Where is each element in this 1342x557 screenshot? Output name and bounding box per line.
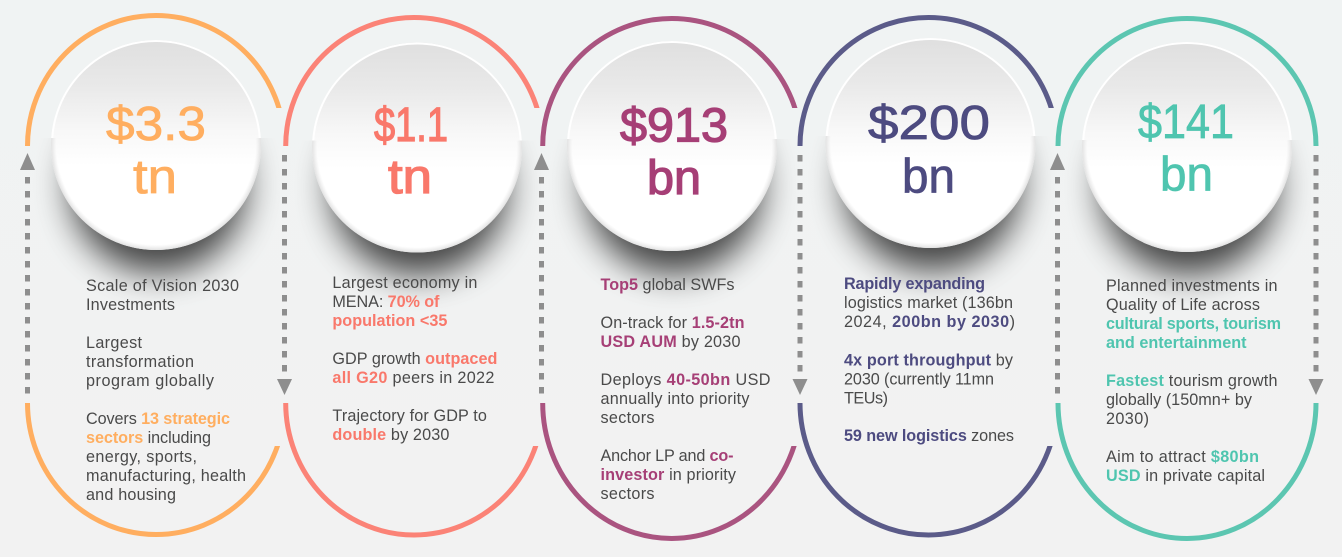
text block: Trajectory for GDP to <box>332 407 487 425</box>
bottom arc: orange <box>28 403 284 535</box>
bottom arc: plum <box>543 403 801 538</box>
value <box>106 98 206 204</box>
value: $1.1 <box>374 99 448 152</box>
text block: 2030 (currently 11mn <box>844 370 994 388</box>
text block <box>86 277 246 504</box>
text block: Fastest tourism growth <box>1106 372 1278 390</box>
text block: Rapidly expanding <box>844 275 985 293</box>
arrow: up, columns 4 to 5 <box>1050 153 1065 394</box>
text block: 2024, 200bn by 2030) <box>844 313 1015 331</box>
top arc: orange <box>28 15 284 146</box>
text block: Planned investments in <box>1106 277 1278 295</box>
panel: $913 bn <box>543 19 801 539</box>
arrow: down, columns 3 to 4 <box>792 155 808 395</box>
value <box>374 99 448 204</box>
panel: $200 bn <box>800 17 1057 535</box>
value <box>868 97 990 204</box>
value: tn <box>133 151 177 204</box>
arrow: down, column 5 right <box>1308 155 1324 395</box>
text block: USD in private capital <box>1106 467 1265 485</box>
text block: Top5 global SWFs <box>600 276 734 294</box>
text block: all G20 peers in 2022 <box>332 369 494 387</box>
text block: population <35 <box>332 312 447 330</box>
text block: On-track for 1.5-2tn <box>600 314 744 332</box>
top arc: coral <box>286 17 543 146</box>
value: bn <box>647 152 701 205</box>
text block: Aim to attract $80bn <box>1106 448 1259 466</box>
panel: $3.3 tn <box>28 15 284 535</box>
text block: Covers 13 strategic <box>86 410 230 428</box>
value: bn <box>1160 148 1213 202</box>
circle badge <box>51 40 261 273</box>
text block: and entertainment <box>1106 334 1247 352</box>
text block: manufacturing, health <box>86 467 246 485</box>
value: $3.3 <box>106 98 206 151</box>
text block: cultural sports, tourism <box>1106 315 1281 333</box>
circle badge <box>1082 42 1292 275</box>
text block: Scale of Vision 2030 <box>86 277 239 295</box>
top arc: teal <box>1058 19 1316 146</box>
text block: double by 2030 <box>332 426 449 444</box>
arrow: up, column 1 left <box>20 153 35 394</box>
text block: energy, sports, <box>86 448 197 466</box>
value: tn <box>388 151 432 204</box>
panel: $141 bn <box>1058 19 1316 539</box>
bottom arc: teal <box>1058 403 1316 538</box>
circle badge <box>826 38 1036 271</box>
text block: TEUs) <box>844 390 888 408</box>
text block: program globally <box>86 372 215 390</box>
arrow: down, columns 1 to 2 <box>277 155 292 395</box>
top arc: indigo <box>800 17 1057 146</box>
value: bn <box>902 150 955 204</box>
text block: MENA: 70% of <box>332 293 440 311</box>
value: $141 <box>1138 96 1234 149</box>
bottom arc: coral <box>286 403 543 535</box>
value: $913 <box>620 100 728 152</box>
text block: transformation <box>86 353 194 371</box>
text block: GDP growth outpaced <box>332 350 497 368</box>
circle badge <box>312 42 522 276</box>
text block: sectors <box>600 485 654 503</box>
text block: sectors <box>600 409 654 427</box>
value: $200 <box>868 97 990 150</box>
top arc: plum <box>543 19 801 146</box>
circle badge <box>567 41 777 274</box>
text block: Largest <box>86 334 142 352</box>
text block: Deploys 40-50bn USD <box>600 371 770 389</box>
text block <box>332 274 497 444</box>
value <box>620 100 728 205</box>
text block: 59 new logistics zones <box>844 427 1014 445</box>
value <box>1138 96 1234 202</box>
panel: $1.1 tn <box>286 17 543 535</box>
text block: sectors including <box>86 429 211 447</box>
bottom arc: indigo <box>800 403 1057 535</box>
text block: USD AUM by 2030 <box>600 333 740 351</box>
text block: annually into priority <box>600 390 750 408</box>
text block <box>600 276 770 503</box>
text block <box>1106 277 1281 485</box>
text block: 4x port throughput by <box>844 352 1014 370</box>
text block: investor in priority <box>600 466 737 484</box>
text block: Anchor LP and co- <box>600 447 734 465</box>
text block: Quality of Life across <box>1106 296 1260 314</box>
text block: Largest economy in <box>332 274 477 292</box>
text block <box>844 275 1015 445</box>
text block: globally (150mn+ by <box>1106 391 1253 409</box>
text block: Investments <box>86 296 175 314</box>
text block: and housing <box>86 486 176 504</box>
arrow: up, columns 2 to 3 <box>534 153 549 394</box>
text block: 2030) <box>1106 410 1149 428</box>
text block: logistics market (136bn <box>844 294 1013 312</box>
